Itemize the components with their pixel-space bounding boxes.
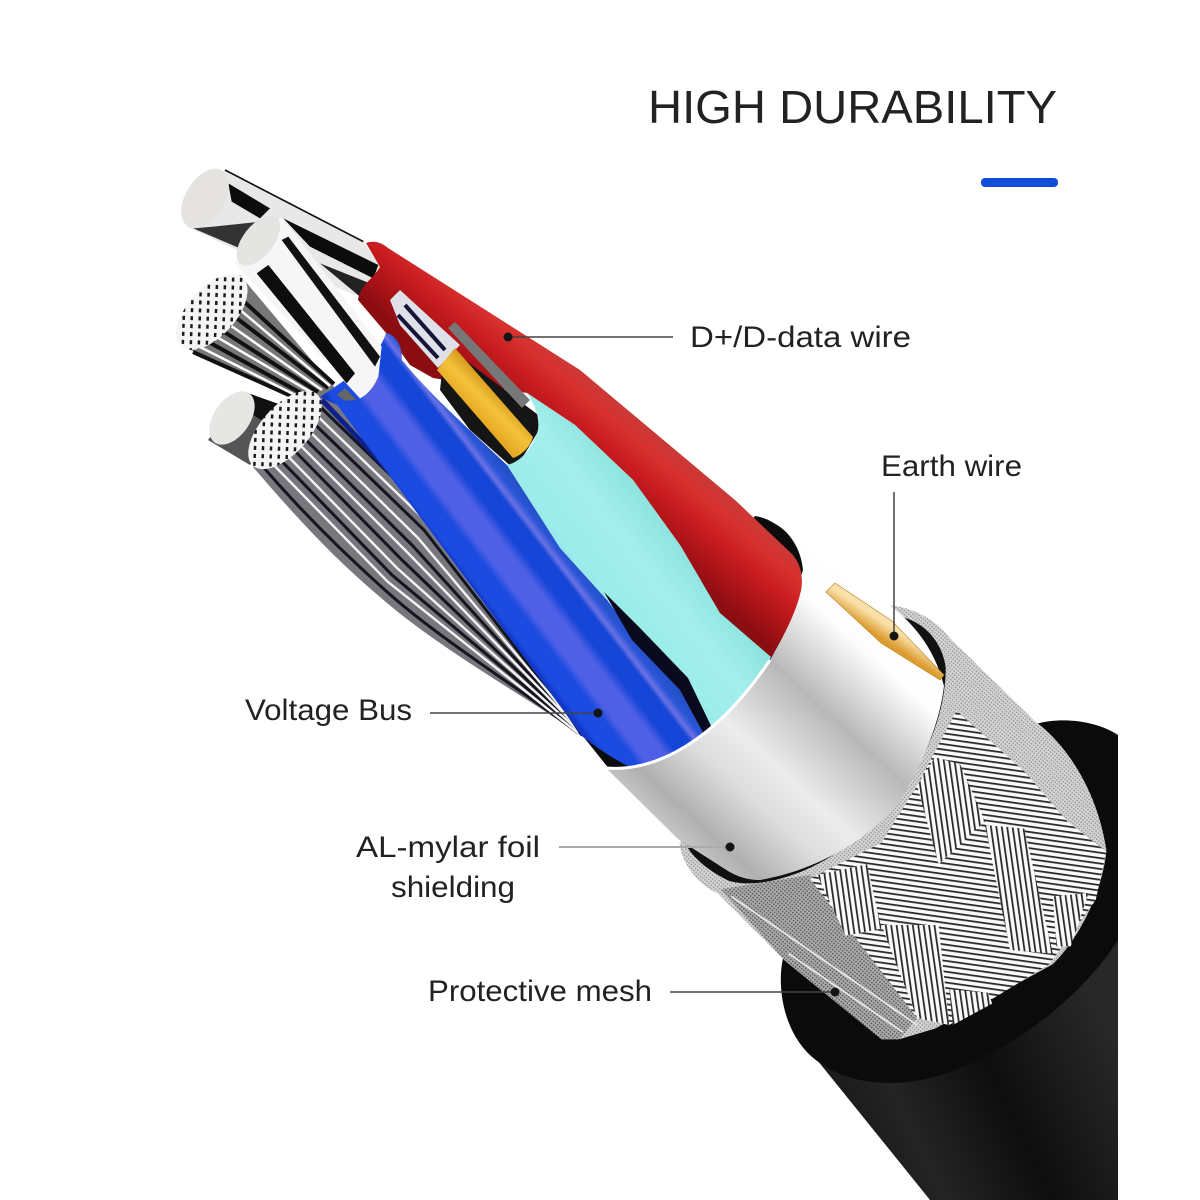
label: D+/D- data wire: D+/D-data wire: [690, 321, 911, 354]
yellow conductor: [437, 348, 533, 458]
conductor end: [228, 208, 288, 273]
label: voltage bus: [245, 694, 602, 727]
label: voltage bus: Voltage Bus: [245, 694, 412, 727]
label: protective mesh: Protective mesh: [428, 975, 652, 1008]
earth wire: [826, 583, 944, 680]
conductor end: [200, 383, 264, 453]
silver conductor: top: [171, 160, 380, 297]
silver conductor: lower: [200, 383, 290, 465]
wire: blue voltage bus jacket: [320, 333, 712, 768]
blue accent bar: [981, 178, 1058, 187]
mesh inner shadow: [687, 616, 946, 883]
label: AL-mylar foil shielding: shielding: [391, 871, 515, 904]
strand end cap: [163, 262, 261, 362]
strand end cap: [235, 378, 335, 482]
steel strand bundle: lower: [235, 378, 583, 737]
wire: red D+/D- jacket: [358, 242, 802, 657]
label: AL-mylar foil shielding: [356, 831, 734, 904]
conductor end: [171, 160, 239, 236]
mesh highlight seams: [731, 896, 917, 1032]
wire: small silver and yellow data conductors: [390, 290, 533, 458]
label: D+/D- data wire: [504, 321, 911, 354]
black cable jacket body: [805, 920, 1118, 1200]
label: earth wire: Earth wire: [881, 450, 1022, 483]
dark interior of foil: [578, 516, 803, 775]
label: earth wire: [881, 450, 1022, 640]
dark gap between blue and teal: [604, 592, 714, 738]
protective mesh braid: [680, 605, 1106, 1039]
title: HIGH DURABILITY: [648, 81, 1057, 133]
foil edge highlight: [606, 660, 770, 768]
foil shielding: [606, 520, 944, 880]
steel strand bundle: upper: [163, 262, 345, 402]
label: protective mesh: [428, 975, 840, 1008]
black cable jacket ring: [781, 720, 1118, 1083]
dark cavity between wires: [440, 345, 545, 470]
lower mesh strip: [721, 875, 917, 1039]
label: AL-mylar foil shielding: AL-mylar foil: [356, 831, 540, 864]
silver conductor: centre: [228, 208, 382, 401]
braid herringbone blocks: [810, 711, 1106, 1025]
wire: teal jacket: [507, 393, 771, 729]
